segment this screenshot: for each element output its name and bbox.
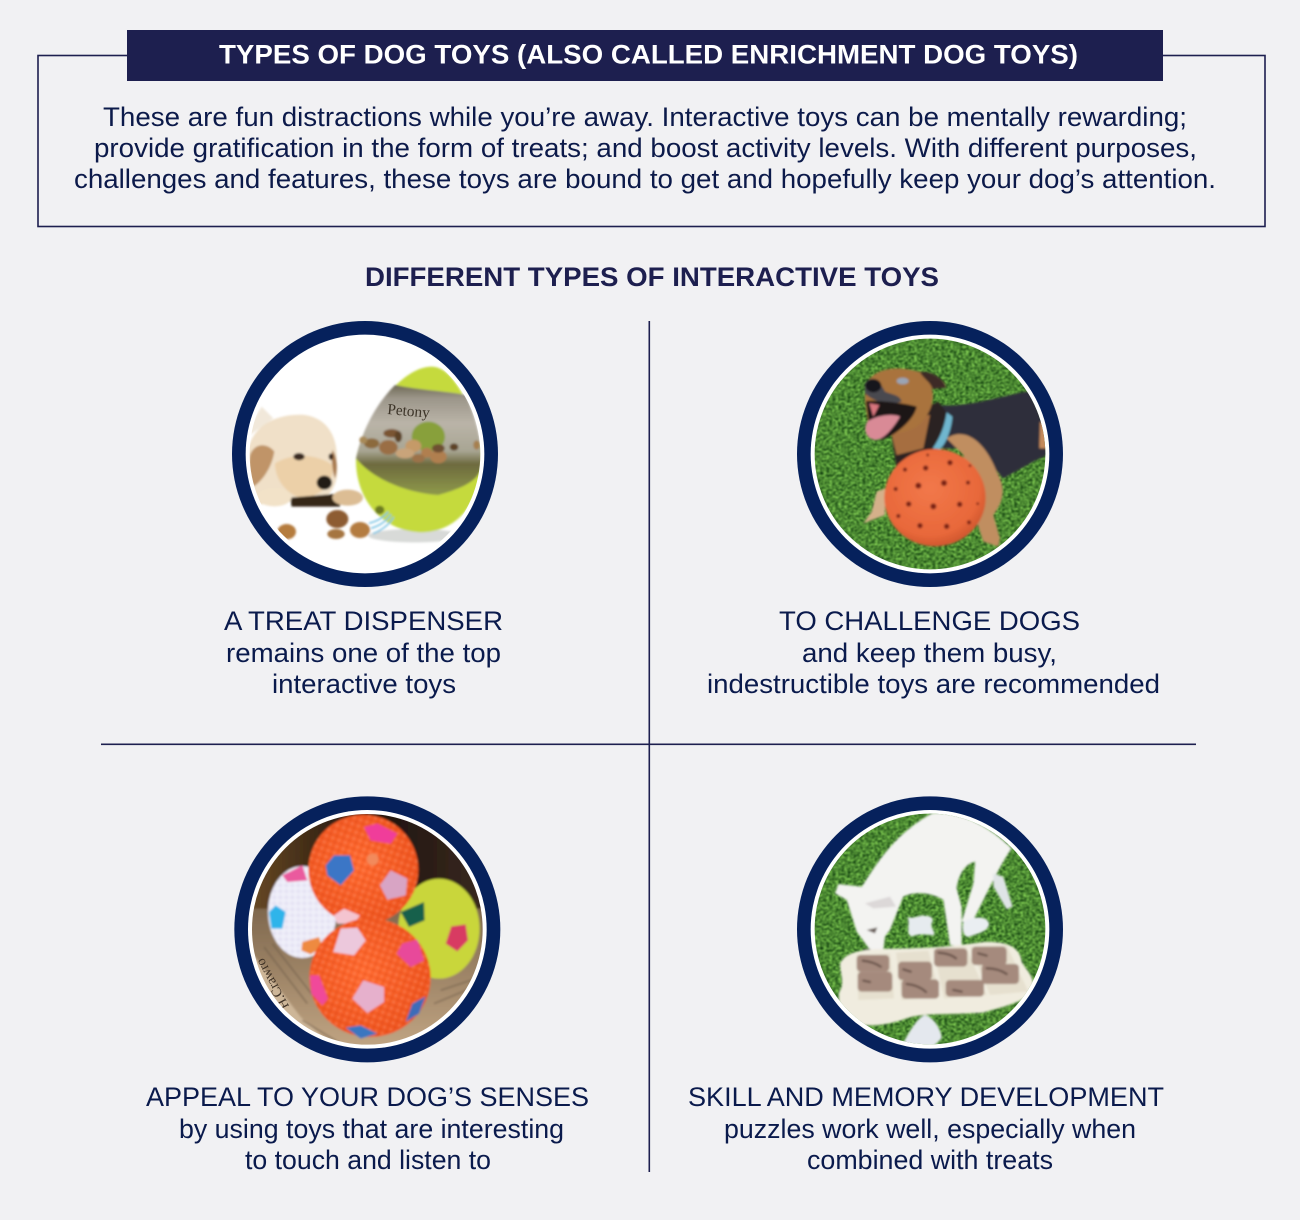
intro paragraph: provide gratification in the form of treats; and boost activity levels. With different purposes, xyxy=(94,133,1197,163)
mouth and tongue xyxy=(866,401,917,440)
caption: and keep them busy, xyxy=(802,638,1057,668)
caption xyxy=(688,1082,1164,1175)
intro paragraph xyxy=(74,102,1216,194)
icon: photo of puppy and treat dispenser xyxy=(232,321,498,587)
section heading: DIFFERENT TYPES OF INTERACTIVE TOYS xyxy=(365,262,939,292)
title banner xyxy=(127,30,1163,81)
caption xyxy=(224,606,503,699)
icon: photo of spiky soccer balls xyxy=(234,796,500,1062)
yellow ball xyxy=(398,879,480,979)
dog head xyxy=(864,367,946,422)
caption: A TREAT DISPENSER xyxy=(224,606,503,636)
lower orange ball xyxy=(309,918,431,1037)
logo on toy: Petony xyxy=(387,401,431,422)
caption: remains one of the top xyxy=(226,638,501,668)
caption: indestructible toys are recommended xyxy=(707,669,1160,699)
puppy xyxy=(250,407,273,435)
intro paragraph: challenges and features, these toys are bound to get and hopefully keep your dog’s attention. xyxy=(74,164,1216,194)
caption: APPEAL TO YOUR DOG’S SENSES xyxy=(146,1082,589,1112)
caption: puzzles work well, especially when xyxy=(724,1114,1136,1144)
intro panel: types of dog toys xyxy=(38,30,1265,226)
caption: TO CHALLENGE DOGS xyxy=(779,606,1080,636)
caption: SKILL AND MEMORY DEVELOPMENT xyxy=(688,1082,1164,1112)
bone puzzle xyxy=(839,942,1033,1025)
title banner: TYPES OF DOG TOYS (ALSO CALLED ENRICHMENT DOG TOYS) xyxy=(219,40,1078,70)
caption: by using toys that are interesting xyxy=(179,1114,564,1144)
panel: appeal to senses xyxy=(146,796,589,1175)
caption: to touch and listen to xyxy=(245,1145,491,1175)
caption xyxy=(146,1082,589,1175)
upper orange ball xyxy=(316,826,339,845)
intro paragraph: These are fun distractions while you’re away. Interactive toys can be mentally rewarding; xyxy=(103,102,1187,132)
collar xyxy=(933,412,952,449)
icon: photo of dog with orange ball xyxy=(797,321,1063,587)
caption: combined with treats xyxy=(807,1145,1053,1175)
ball xyxy=(884,449,986,546)
caption xyxy=(707,606,1160,699)
kibble xyxy=(277,524,296,539)
treat toy xyxy=(368,529,462,542)
panel: skill and memory xyxy=(688,796,1164,1175)
panel outline xyxy=(38,56,1265,226)
white ball xyxy=(268,866,337,958)
newspaper masthead: H.Crawro xyxy=(254,955,293,1011)
panel: treat dispenser xyxy=(224,321,503,699)
icon: photo of dog with bone puzzle xyxy=(797,796,1063,1062)
caption: interactive toys xyxy=(272,669,456,699)
dog body xyxy=(933,391,1047,478)
toy pieces xyxy=(907,915,934,937)
panel: challenge dogs xyxy=(707,321,1160,699)
white dog xyxy=(835,813,1012,950)
